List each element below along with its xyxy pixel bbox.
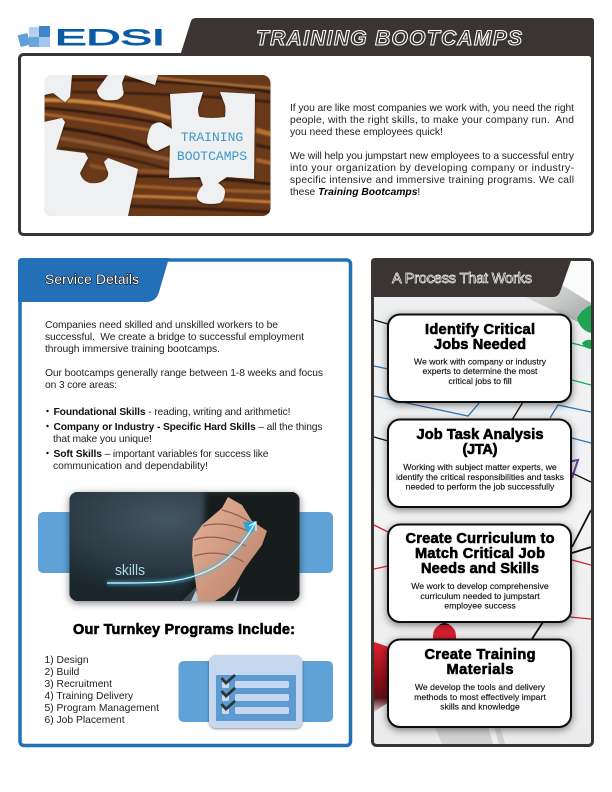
card: create training materials: methods to most effectively impart: [414, 692, 546, 702]
card: create curriculum: Match Critical Job: [415, 546, 545, 562]
card: identify critical jobs: Jobs Needed: [434, 337, 526, 353]
programs list: 2) Build: [44, 667, 80, 678]
service description: successful. We create a bridge to successful employment: [45, 332, 304, 343]
card: identify critical jobs: critical jobs to fill: [448, 376, 512, 386]
intro text: people, with the right skills, to make your company run. And: [290, 115, 574, 126]
card: identify critical jobs: [388, 314, 571, 402]
panel: service details: [18, 258, 350, 746]
programs list: 3) Recruitment: [44, 679, 112, 690]
whiteboard background with markers and lines: [374, 261, 591, 744]
heading: A Process That Works: [392, 271, 532, 287]
card: identify critical jobs: experts to determine the most: [423, 366, 538, 376]
intro text: If you are like most companies we work with, you need the right: [290, 103, 574, 114]
photo: puzzle pieces on wood: TRAINING: [181, 130, 243, 145]
card: create training materials: We develop the tools and delivery: [415, 682, 546, 692]
panel frame: [20, 260, 350, 746]
photo: hand drawing skills curve: [69, 492, 300, 601]
programs list: 5) Program Management: [44, 703, 159, 714]
card: job task analysis: Job Task Analysis: [416, 427, 544, 443]
photo: puzzle pieces on wood: [44, 75, 271, 216]
panel: process: [371, 258, 592, 746]
service description: [45, 320, 323, 391]
card: create curriculum: employee success: [444, 600, 516, 610]
intro panel frame: [20, 54, 592, 234]
programs list: 1) Design: [44, 655, 89, 666]
card: create curriculum: Create Curriculum to: [406, 531, 555, 547]
programs list: [44, 655, 159, 726]
card: job task analysis: Working with subject matter experts, we: [403, 462, 557, 472]
core areas list: Company or Industry - Specific Hard Skills – all the things: [54, 422, 322, 433]
card: job task analysis: (JTA): [462, 442, 498, 458]
panel frame: [372, 260, 592, 746]
photo: puzzle pieces on wood: BOOTCAMPS: [177, 149, 247, 164]
panel: intro: [20, 18, 594, 234]
card: create curriculum: curriculum needed to jumpstart: [420, 591, 540, 601]
core areas list: Soft Skills – important variables for success like: [54, 449, 269, 460]
intro text: you need these employees quick!: [290, 127, 443, 138]
card: create curriculum: [388, 524, 571, 622]
card: job task analysis: needed to perform the job successfully: [406, 482, 555, 492]
core areas list: [46, 407, 323, 472]
intro text: [290, 103, 575, 198]
card: job task analysis: [388, 420, 571, 507]
service description: on 3 core areas:: [45, 380, 117, 391]
header tab: [371, 258, 572, 297]
card: identify critical jobs: Identify Critical: [425, 322, 535, 338]
card: create training materials: [388, 640, 571, 727]
card: job task analysis: identify the critical responsibilities and tasks: [396, 472, 565, 482]
title: TRAINING BOOTCAMPS: [256, 27, 522, 50]
heading: Service Details: [45, 272, 139, 287]
intro text: these Training Bootcamps!: [290, 187, 420, 198]
core areas list: that make you unique!: [53, 434, 152, 445]
header tab: [180, 18, 594, 60]
card: identify critical jobs: We work with company or industry: [414, 356, 547, 366]
service description: Our bootcamps generally range between 1-8 weeks and focus: [45, 368, 323, 379]
intro text: We will help you jumpstart new employees to a successful entry: [290, 151, 575, 162]
logo: EDSI: EDSI: [55, 25, 165, 50]
intro text: into your organization by developing company or industry-: [290, 163, 574, 174]
header tab: [18, 258, 169, 302]
card: create training materials: Create Training: [424, 647, 536, 663]
core areas list: Foundational Skills - reading, writing and arithmetic!: [54, 407, 290, 418]
programs list: 6) Job Placement: [44, 715, 125, 726]
icon: checklist: [178, 655, 333, 728]
subheading: Our Turnkey Programs Include:: [73, 622, 295, 638]
service description: Companies need skilled and unskilled workers to be: [45, 320, 278, 331]
card: create curriculum: We work to develop comprehensive: [411, 581, 549, 591]
blue band behind photo: [38, 512, 333, 573]
card: create curriculum: Needs and Skills: [421, 561, 539, 577]
photo: hand drawing skills curve: skills: [115, 563, 145, 579]
programs list: 4) Training Delivery: [44, 691, 134, 702]
core areas list: communication and dependability!: [53, 461, 208, 472]
logo: EDSI: [18, 25, 165, 50]
card: create training materials: skills and knowledge: [440, 702, 520, 712]
service description: through immersive training bootcamps.: [45, 344, 220, 355]
intro text: specific intensive and immersive training programs. We call: [290, 175, 574, 186]
card: create training materials: Materials: [446, 662, 514, 678]
